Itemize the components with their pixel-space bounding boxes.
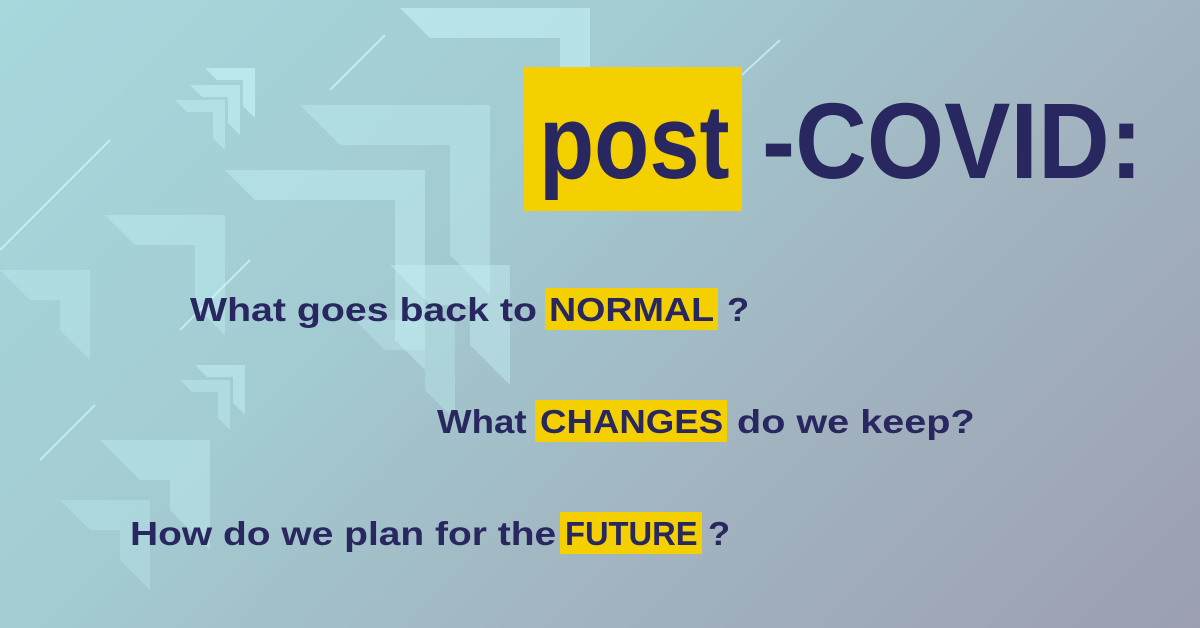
highlight CHANGES xyxy=(535,400,727,442)
question 2: do we keep? xyxy=(737,403,975,440)
title text: post: post xyxy=(539,84,730,201)
question 3: How do we plan for the xyxy=(130,515,556,552)
title text: -COVID:: -COVID: xyxy=(762,80,1143,201)
question 2: What xyxy=(437,403,527,440)
question 3 xyxy=(130,512,730,554)
title highlight: post xyxy=(524,67,742,211)
highlight NORMAL xyxy=(545,288,718,330)
question 2: CHANGES xyxy=(540,403,723,440)
question 2 xyxy=(437,400,975,442)
highlight FUTURE xyxy=(560,512,702,554)
question 3: ? xyxy=(708,515,730,552)
question 1: What goes back to xyxy=(190,291,537,328)
question 1 xyxy=(190,288,749,330)
question 1: ? xyxy=(727,291,749,328)
question 3: FUTURE xyxy=(565,515,697,552)
title xyxy=(524,67,1143,211)
question 1: NORMAL xyxy=(549,291,714,328)
